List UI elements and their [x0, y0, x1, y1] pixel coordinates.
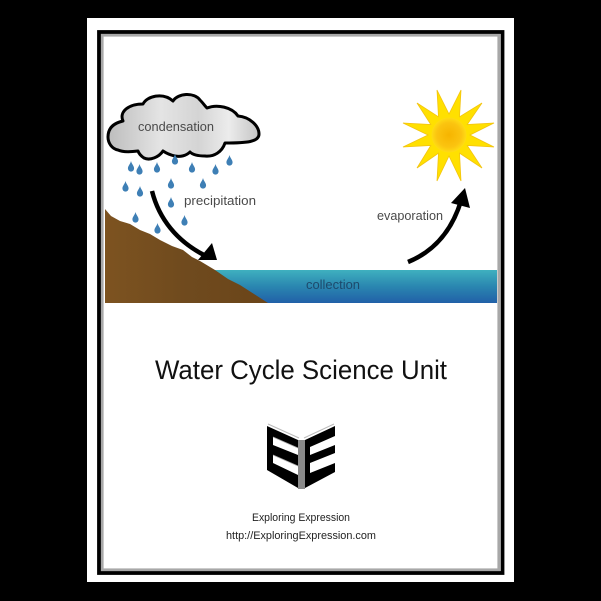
title: Water Cycle Science Unit	[155, 355, 447, 385]
ground slope	[105, 209, 268, 303]
page	[87, 18, 514, 582]
arrow: evaporation	[408, 188, 470, 262]
label: precipitation: precipitation	[184, 194, 256, 208]
label: collection: collection	[306, 278, 360, 292]
sun	[403, 90, 494, 181]
water: collection	[212, 270, 497, 303]
logo: open book EE	[267, 424, 335, 489]
page border	[99, 32, 502, 573]
publisher url: http://ExploringExpression.com	[226, 530, 376, 542]
cloud: condensation	[108, 94, 259, 159]
precipitation drops	[122, 154, 233, 234]
water cycle diagram	[105, 90, 497, 303]
arrow: precipitation	[152, 191, 217, 260]
label: condensation: condensation	[138, 120, 214, 134]
label: evaporation: evaporation	[377, 209, 443, 223]
publisher name: Exploring Expression	[252, 512, 350, 524]
